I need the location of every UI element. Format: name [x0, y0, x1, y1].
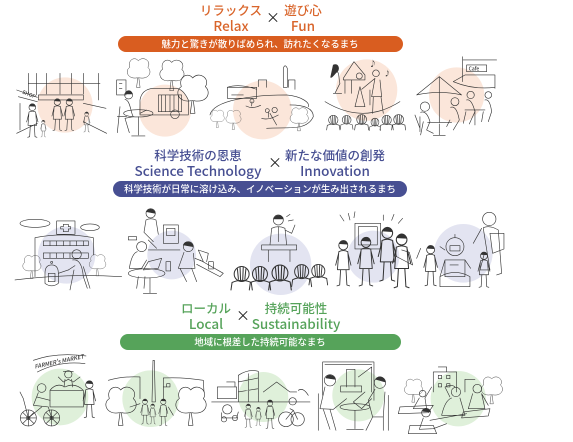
heading: local: [181, 298, 231, 333]
illustrations: science and innovation: [15, 209, 504, 295]
section: science technology and innovation: [15, 145, 504, 295]
illustration: concert: ♪: [384, 67, 391, 77]
heading: fun: Fun: [291, 15, 315, 35]
illustration: shopping street: [17, 73, 107, 137]
heading: innovation: [285, 145, 385, 180]
illustration: team handshake: [336, 212, 413, 288]
section: local and sustainability: [20, 298, 503, 434]
heading: innovation: Innovation: [300, 160, 370, 180]
banner: navy: 科学技術が日常に溶け込み、イノベーションが生み出されるまち: [124, 182, 396, 196]
illustration: book van and park: [117, 59, 208, 137]
illustration: park lake: [210, 66, 313, 139]
multiply sign: ×: [268, 153, 282, 173]
multiply sign: ×: [236, 306, 250, 326]
banner: green: [120, 334, 401, 350]
heading: science technology: 科学技術の恩恵: [154, 145, 242, 164]
multiply sign: ×: [266, 8, 280, 28]
heading: sustainability: Sustainability: [252, 313, 341, 333]
heading: relax: [200, 0, 262, 35]
illustrations: local and sustainability: [20, 351, 503, 434]
banner: green: 地域に根差した持続可能なまち: [194, 334, 326, 348]
illustration: concert: ♪: [369, 58, 377, 69]
heading: sustainability: 持続可能性: [265, 298, 327, 317]
illustration: speaker and audience: [231, 214, 328, 295]
illustration: cafe terrace: [415, 57, 497, 135]
heading: science technology: [134, 145, 262, 180]
section: relax and fun: [17, 0, 497, 139]
illustration: meeting with city view: [318, 362, 388, 430]
heading: relax: リラックス: [200, 0, 262, 19]
illustration: robot and children: [417, 212, 504, 287]
heading: local: Local: [189, 313, 223, 333]
heading: fun: 遊び心: [284, 0, 322, 19]
illustration: coworking lab: [128, 209, 223, 293]
illustrations: relax and fun: [17, 57, 497, 139]
illustration: shopping street: SHOP: [21, 89, 37, 100]
banner: orange: 魅力と驚きが散りばめられ、訪れたくなるまち: [162, 36, 358, 50]
illustration: cafe terrace: Cafe: [469, 65, 479, 72]
heading: fun: [284, 0, 322, 35]
illustration: park walk: [106, 360, 206, 427]
heading: relax: Relax: [213, 15, 249, 35]
illustration: concert: [325, 58, 406, 131]
heading: local: ローカル: [181, 298, 231, 317]
heading: innovation: 新たな価値の創発: [285, 145, 385, 164]
illustration: hospital and robot: [15, 219, 122, 290]
banner: orange: [118, 36, 403, 52]
heading: sustainability: [252, 298, 341, 333]
illustration: town with families: [212, 371, 310, 429]
illustration: farmers market: [20, 351, 96, 426]
illustration: farmers market: FARMER's MARKET: [34, 351, 86, 371]
heading: science technology: Science Technology: [134, 160, 262, 180]
illustration: outdoor yoga: [398, 367, 503, 434]
